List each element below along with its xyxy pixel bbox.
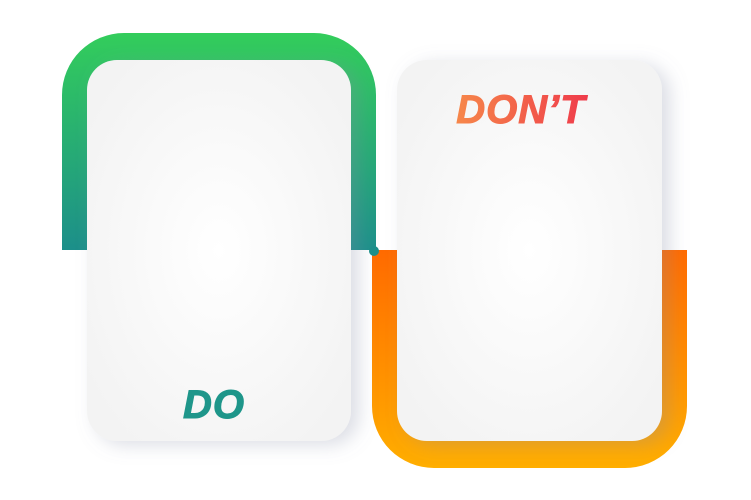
heading: DO: DO bbox=[183, 383, 245, 427]
panel: do card bbox=[87, 60, 351, 441]
panel: dont card bbox=[397, 60, 662, 441]
orange frame bbox=[372, 250, 687, 468]
connector dot bbox=[369, 246, 379, 256]
green frame bbox=[62, 33, 376, 250]
heading: DON'T: DON’T bbox=[456, 88, 588, 132]
